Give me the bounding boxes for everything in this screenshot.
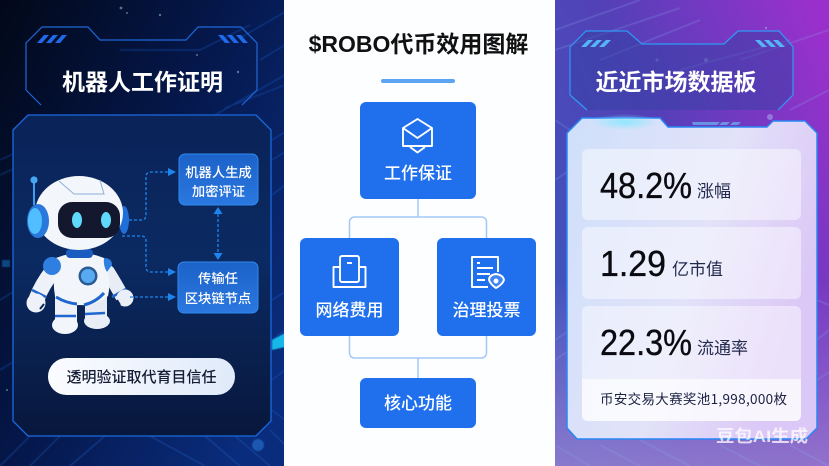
icon: documents xyxy=(334,256,366,287)
stat: market cap: 1.29 xyxy=(600,243,666,284)
box: transfer to chain node xyxy=(178,262,258,313)
arrow: robot to transfer node xyxy=(122,236,169,272)
callout pill: 透明验证取代育目信任 xyxy=(66,366,217,387)
icon: ballot document xyxy=(472,257,504,288)
robot illustration xyxy=(26,176,134,334)
card: work guarantee: 工作保证 xyxy=(384,159,452,184)
card: governance voting xyxy=(437,238,536,336)
box: generate credential: 加密评证 xyxy=(192,181,245,200)
heading: right panel title: 近近市场数据板 xyxy=(596,63,756,97)
stat: market cap: 亿市值 xyxy=(672,255,723,280)
stat: circulation: 流通率 xyxy=(697,334,748,359)
arrow: robot to credential xyxy=(129,172,169,220)
note: prize pool xyxy=(582,379,801,421)
connector lines xyxy=(350,199,486,378)
stat: gain: 48.2% xyxy=(600,165,692,206)
icon: open box xyxy=(403,119,432,152)
watermark: 豆包AI生成 xyxy=(716,426,808,446)
title underline xyxy=(381,79,455,83)
card: core function: 核心功能 xyxy=(384,389,452,414)
panel: right background xyxy=(555,0,829,466)
stat: circulation: 22.3% xyxy=(600,322,692,363)
stat: gain xyxy=(582,149,801,220)
card: network fees xyxy=(300,238,399,336)
stat: circulation xyxy=(582,306,801,421)
card: network fees: 网络费用 xyxy=(316,296,384,321)
stat: market cap xyxy=(582,227,801,299)
panel: left header frame xyxy=(26,27,257,105)
arrow: two-way credential and node xyxy=(214,207,222,260)
card: governance voting: 治理投票 xyxy=(452,296,520,321)
card: core function xyxy=(360,378,476,428)
note: prize pool: 币安交易大赛奖池1,998,000枚 xyxy=(600,388,788,408)
box: generate credential xyxy=(179,154,258,205)
card: work guarantee xyxy=(360,102,476,199)
panel: left background xyxy=(0,0,285,466)
stat: gain: 涨幅 xyxy=(697,177,731,202)
panel: center background xyxy=(284,0,555,466)
arrow: hand to transfer node xyxy=(130,296,169,298)
panel: proof of robot work xyxy=(13,115,271,436)
box: generate credential: 机器人生成 xyxy=(185,162,252,181)
panel: right header frame xyxy=(570,31,793,110)
box: transfer to chain node: 区块链节点 xyxy=(185,288,251,307)
callout pill xyxy=(48,358,235,395)
box: transfer to chain node: 传输任 xyxy=(198,268,238,287)
heading: center title: $ROBO代币效用图解 xyxy=(309,25,528,59)
icon: left header stripes xyxy=(37,35,248,43)
icon: right header stripes xyxy=(581,40,785,47)
panel: market dashboard xyxy=(567,114,817,439)
heading: left panel title: 机器人工作证明 xyxy=(62,63,223,97)
